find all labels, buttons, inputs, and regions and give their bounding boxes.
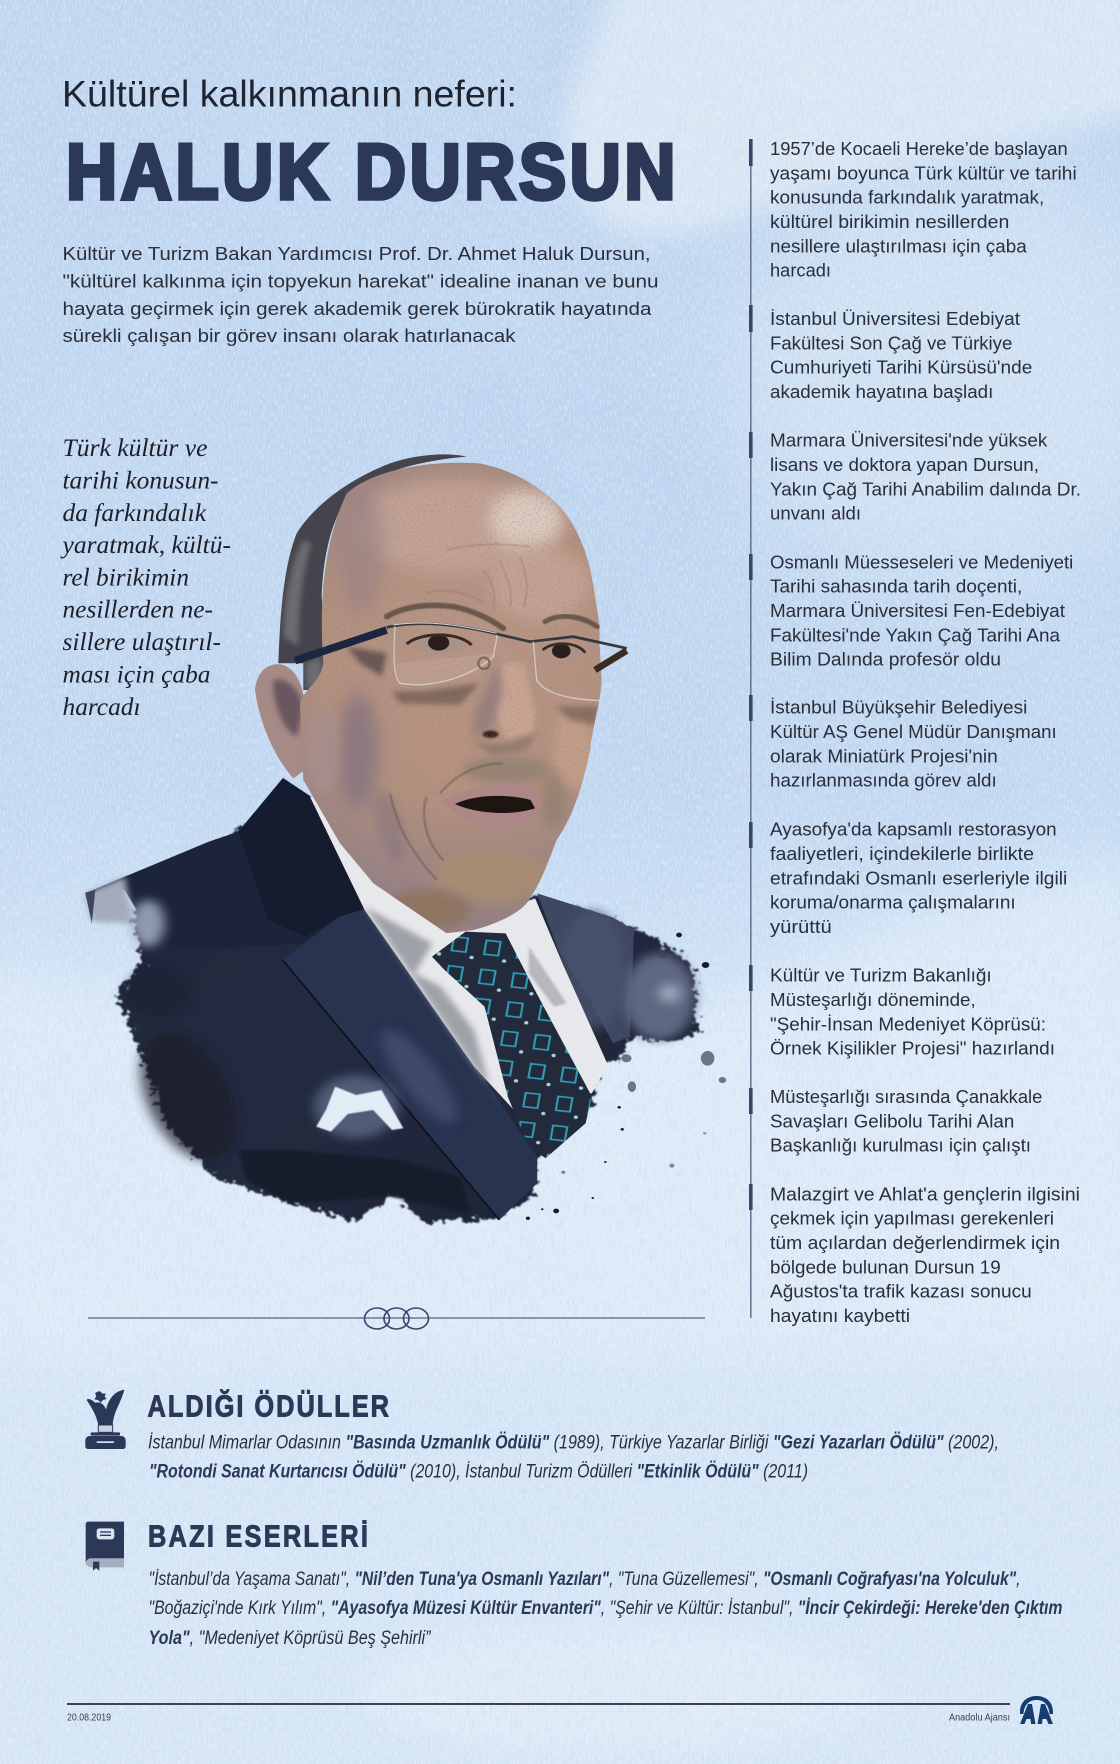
shirt bbox=[310, 797, 608, 1113]
timeline entry 6 bbox=[770, 819, 1067, 937]
title: name: HALUK DURSUN bbox=[66, 128, 679, 215]
timeline entry 9: bölgede bulunan Dursun 19 bbox=[770, 1256, 1001, 1277]
crisp right shoulder bbox=[537, 893, 634, 1043]
footer rule bbox=[67, 1703, 1010, 1705]
timeline entry 5: hazırlanmasında görev aldı bbox=[770, 770, 997, 791]
works text: "Boğaziçi'nde Kırk Yılım", "Ayasofya Müzesi Kültür Envanteri", "Şehir ve Kültür: İstanbul", "İncir Çekirdeği: Hereke'den Çıktım bbox=[148, 1596, 1062, 1619]
timeline entry 4: Osmanlı Müesseseleri ve Medeniyeti bbox=[770, 551, 1073, 572]
smile lines bbox=[390, 763, 503, 880]
timeline entry 8: Başkanlığı kurulması için çalıştı bbox=[770, 1135, 1031, 1156]
timeline entry 7: Müsteşarlığı döneminde, bbox=[770, 989, 976, 1010]
timeline entry 7: Kültür ve Turizm Bakanlığı bbox=[770, 965, 992, 986]
timeline entry 9: tüm açılardan değerlendirmek için bbox=[770, 1232, 1060, 1253]
timeline entry 6: yürüttü bbox=[770, 916, 832, 937]
hair grey streaks bbox=[283, 540, 323, 690]
crisp shoulder bbox=[85, 778, 373, 950]
italic quote: nesillerden ne- bbox=[62, 597, 213, 624]
timeline entry 9: Ağustos'ta trafik kazası sonucu bbox=[770, 1281, 1032, 1302]
timeline entry 9: Malazgirt ve Ahlat'a gençlerin ilgisini bbox=[770, 1183, 1080, 1204]
right shoulder wash bbox=[558, 910, 695, 1040]
works heading: BAZI ESERLERİ bbox=[148, 1519, 370, 1554]
ear bbox=[255, 664, 305, 778]
italic quote bbox=[59, 435, 231, 721]
timeline entry 6: Ayasofya'da kapsamlı restorasyon bbox=[770, 819, 1057, 840]
timeline entry 2: İstanbul Üniversitesi Edebiyat bbox=[770, 308, 1020, 329]
timeline entry 4: Bilim Dalında profesör oldu bbox=[770, 649, 1001, 670]
timeline entry 5: İstanbul Büyükşehir Belediyesi bbox=[770, 697, 1027, 718]
date: 20.08.2019 bbox=[67, 1712, 111, 1724]
timeline entry 8: Savaşları Gelibolu Tarihi Alan bbox=[770, 1110, 1014, 1131]
timeline entry 1: kültürel birikimin nesillerden bbox=[770, 211, 1009, 232]
necktie bbox=[432, 932, 592, 1158]
timeline entry 5: Kültür AŞ Genel Müdür Danışmanı bbox=[770, 721, 1057, 742]
lens interior light bbox=[395, 653, 493, 685]
suit and tie bbox=[85, 778, 697, 1223]
timeline entry 6: etrafındaki Osmanlı eserleriyle ilgili bbox=[770, 867, 1067, 888]
timeline rule and markers bbox=[749, 139, 753, 1318]
works text: "İstanbul’da Yaşama Sanatı", "Nil’den Tuna'ya Osmanlı Yazıları", "Tuna Güzellemesi", "Osmanlı Coğrafyası'na Yolculuk", bbox=[148, 1568, 1020, 1590]
face skin bbox=[297, 457, 607, 937]
icon: book bbox=[86, 1522, 124, 1571]
awards text: "Rotondi Sanat Kurtarıcısı Ödülü" (2010), İstanbul Turizm Ödülleri "Etkinlik Ödülü" (2011) bbox=[149, 1459, 808, 1482]
head bbox=[255, 454, 627, 937]
left shoulder wash bbox=[85, 877, 254, 1170]
timeline entry 9: çekmek için yapılması gerekenleri bbox=[770, 1208, 1054, 1229]
awards heading: ALDIĞI ÖDÜLLER bbox=[148, 1389, 391, 1424]
glasses bbox=[295, 623, 627, 701]
timeline entry 3: Yakın Çağ Tarihi Anabilim dalında Dr. bbox=[770, 478, 1081, 499]
awards text: İstanbul Mimarlar Odasının "Basında Uzmanlık Ödülü" (1989), Türkiye Yazarlar Birliği "Gezi Yazarları Ödülü" (2002), bbox=[148, 1430, 999, 1453]
pocket area bbox=[238, 1150, 470, 1213]
eyes bbox=[407, 635, 585, 658]
lens shadows bbox=[392, 683, 480, 705]
timeline entry 2: Fakültesi Son Çağ ve Türkiye bbox=[770, 332, 1012, 353]
italic quote: tarihi konusun- bbox=[62, 468, 218, 494]
forehead creases bbox=[427, 544, 530, 610]
timeline entry 4: Tarihi sahasında tarih doçenti, bbox=[770, 576, 1022, 597]
awards text bbox=[148, 1430, 999, 1482]
nose bbox=[497, 663, 535, 740]
timeline entry 1: yaşamı boyunca Türk kültür ve tarihi bbox=[770, 162, 1077, 183]
italic quote: Türk kültür ve bbox=[62, 435, 208, 462]
timeline entry 2: Cumhuriyeti Tarihi Kürsüsü'nde bbox=[770, 357, 1032, 378]
timeline entry 3 bbox=[770, 430, 1081, 524]
mouth bbox=[440, 783, 544, 831]
timeline entry 1 bbox=[770, 138, 1077, 281]
timeline entry 1: nesillere ulaştırılması için çaba bbox=[770, 235, 1027, 256]
timeline entry 8: Müsteşarlığı sırasında Çanakkale bbox=[770, 1086, 1042, 1107]
timeline entry 4 bbox=[770, 551, 1073, 670]
timeline entry 3: Marmara Üniversitesi'nde yüksek bbox=[770, 430, 1048, 451]
intro text block bbox=[62, 243, 658, 346]
jacket body, rough ink edges bbox=[116, 797, 697, 1223]
italic quote: harcadı bbox=[62, 694, 140, 721]
works text bbox=[148, 1568, 1062, 1649]
intro text block: "kültürel kalkınma için topyekun harekat" idealine inanan ve bunu bbox=[62, 270, 658, 292]
timeline entry 3: unvanı aldı bbox=[770, 503, 861, 524]
timeline entry 8 bbox=[770, 1086, 1042, 1156]
timeline entry 6: koruma/onarma çalışmalarını bbox=[770, 892, 1016, 913]
timeline entry 9: hayatını kaybetti bbox=[770, 1305, 910, 1326]
divider with three rings bbox=[88, 1308, 705, 1329]
timeline entry 6: faaliyetleri, içindekilerle birlikte bbox=[770, 843, 1034, 864]
intro text block: Kültür ve Turizm Bakan Yardımcısı Prof. Dr. Ahmet Haluk Dursun, bbox=[62, 243, 650, 264]
pale paper patch bbox=[316, 1087, 403, 1132]
intro text block: sürekli çalışan bir görev insanı olarak hatırlanacak bbox=[62, 325, 516, 346]
ink splatter bbox=[526, 933, 726, 1220]
timeline entry 3: lisans ve doktora yapan Dursun, bbox=[770, 454, 1039, 475]
italic quote: ması için çaba bbox=[62, 661, 210, 688]
timeline entry 9 bbox=[770, 1183, 1080, 1326]
intro text block: hayata geçirmek için gerek akademik gerek bürokratik hayatında bbox=[62, 298, 652, 319]
timeline entry 4: Marmara Üniversitesi Fen-Edebiyat bbox=[770, 600, 1065, 621]
skin pores bbox=[297, 457, 607, 937]
agency name: Anadolu Ajansı bbox=[949, 1712, 1010, 1724]
icon: Anadolu Agency logo bbox=[1020, 1696, 1053, 1724]
hair bbox=[278, 454, 467, 690]
lapel bbox=[283, 907, 537, 1220]
timeline entry 2: akademik hayatına başladı bbox=[770, 381, 993, 402]
timeline entry 2 bbox=[770, 308, 1032, 402]
timeline entry 7 bbox=[770, 965, 1055, 1059]
timeline entry 1: 1957’de Kocaeli Hereke’de başlayan bbox=[770, 138, 1068, 159]
italic quote: rel birikimin bbox=[62, 564, 189, 591]
title: subtitle line: Kültürel kalkınmanın neferi: bbox=[62, 74, 517, 114]
portrait: man in suit with ink-wash edges bbox=[85, 454, 726, 1223]
timeline entry 5: olarak Miniatürk Projesi'nin bbox=[770, 745, 998, 766]
timeline entry 4: Fakültesi'nde Yakın Çağ Tarihi Ana bbox=[770, 624, 1061, 645]
eyebrows bbox=[387, 605, 597, 628]
italic quote: sillere ulaştırıl- bbox=[62, 629, 221, 656]
timeline entry 7: "Şehir-İnsan Medeniyet Köprüsü: bbox=[770, 1013, 1046, 1034]
timeline entry 7: Örnek Kişilikler Projesi" hazırlandı bbox=[770, 1038, 1055, 1059]
icon: trophy bbox=[85, 1390, 126, 1449]
upper collar bbox=[238, 778, 373, 937]
works text: Yola", "Medeniyet Köprüsü Beş Şehirli” bbox=[148, 1627, 432, 1649]
italic quote: da farkındalık bbox=[62, 500, 207, 527]
timeline entry 1: harcadı bbox=[770, 260, 831, 281]
timeline entry 5 bbox=[770, 697, 1057, 791]
timeline entry 1: konusunda farkındalık yaratmak, bbox=[770, 187, 1044, 208]
italic quote: yaratmak, kültü- bbox=[59, 532, 231, 559]
